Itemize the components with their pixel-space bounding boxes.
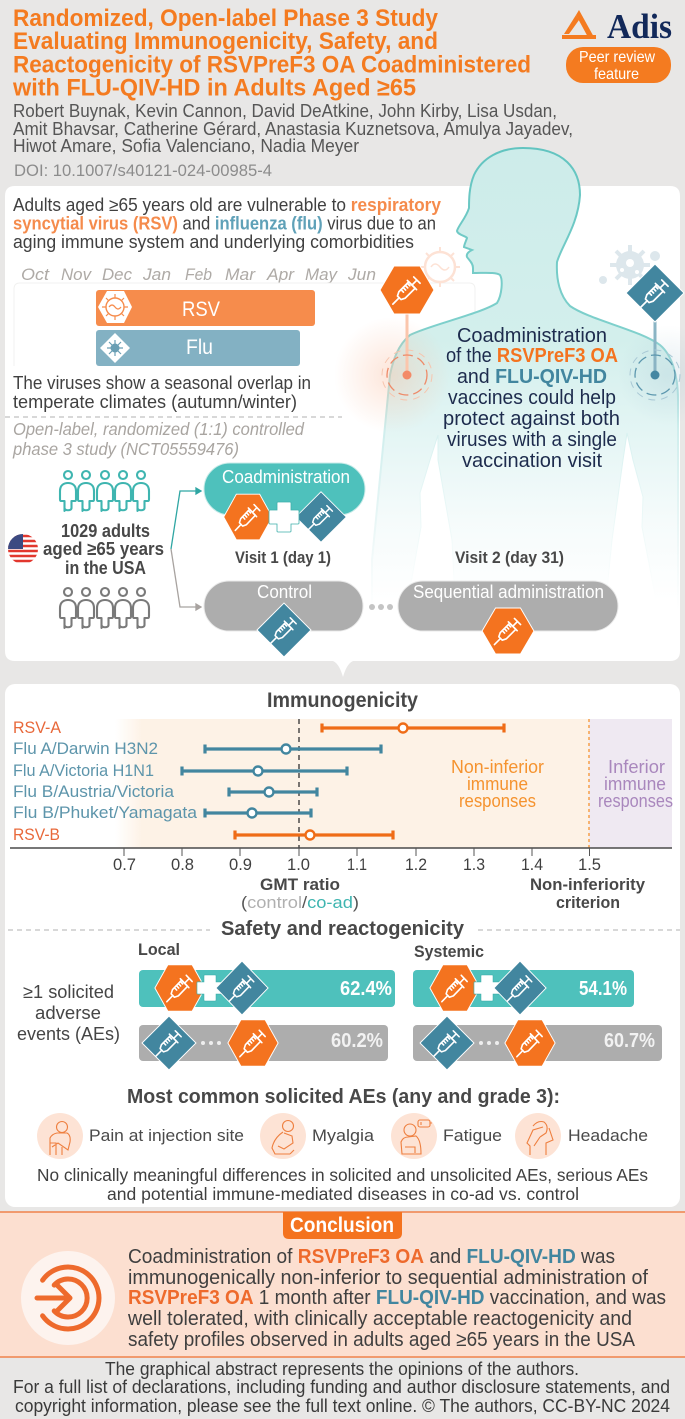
control pill — [204, 581, 363, 657]
seasonal overlap text: The viruses show a seasonal overlap in — [13, 373, 311, 393]
month labels: Oct — [21, 265, 50, 284]
flu bar: Flu — [186, 336, 213, 359]
row: RSV-A: RSV-A — [13, 718, 62, 737]
logo: Adis — [562, 7, 672, 46]
control pill: Control — [257, 582, 312, 602]
logo: Adis: Adis — [607, 7, 672, 46]
axis: 1.2 — [405, 855, 427, 874]
coadministration pill — [204, 463, 365, 542]
row: Flu A/Darwin H3N2: Flu A/Darwin H3N2 — [13, 739, 158, 758]
non-inferior region — [115, 719, 589, 848]
participants: grey group — [60, 588, 149, 628]
inferior region: responses — [598, 791, 673, 811]
badge: peer review feature: Peer review — [579, 49, 655, 66]
conclusion tab: Conclusion — [290, 1214, 394, 1237]
panel: background and study design — [5, 186, 680, 677]
participants text: 1029 adults — [61, 521, 150, 541]
title: Evaluating Immunogenicity, Safety, and — [13, 28, 438, 55]
coadministration message: protect against both — [443, 408, 620, 430]
coadministration message: viruses with a single — [447, 429, 617, 451]
row: Flu A/Victoria H1N1 — [13, 761, 347, 780]
axis: 1.3 — [463, 855, 485, 874]
adverse events label — [17, 982, 120, 1044]
axis — [10, 848, 672, 874]
safety summary text: No clinically meaningful differences in solicited and unsolicited AEs, serious AEs — [37, 1165, 648, 1185]
month labels: May — [305, 265, 338, 284]
safety summary text — [37, 1165, 648, 1204]
adverse events label: ≥1 solicited — [23, 982, 114, 1002]
sequential administration pill: Sequential administration — [413, 582, 604, 602]
authors: Robert Buynak, Kevin Cannon, David DeAtkine, John Kirby, Lisa Usdan, — [13, 101, 557, 121]
arrow to control — [171, 549, 201, 610]
injection site: RSVPreF3 OA — [380, 266, 434, 400]
panel: conclusion — [0, 1212, 685, 1357]
coadministration message: vaccination visit — [462, 450, 602, 472]
authors: Hiwot Amare, Sofia Valenciano, Nadia Meyer — [13, 136, 359, 156]
bar: local co-ad 62.4%: 62.4% — [340, 978, 392, 1000]
non-inferior region: immune — [467, 774, 528, 794]
study type text: phase 3 study (NCT05559476) — [12, 439, 239, 459]
axis title: GMT ratio: GMT ratio — [260, 875, 340, 894]
bar: local control 60.2%: 60.2% — [331, 1030, 383, 1052]
conclusion text: safety profiles observed in adults aged ≥65 years in the USA — [128, 1329, 636, 1351]
axis title: non-inferiority criterion — [530, 875, 646, 912]
badge: peer review feature — [566, 47, 671, 83]
month labels: Feb — [185, 265, 212, 284]
row: Flu A/Darwin H3N2 — [13, 739, 381, 758]
coadministration message: of the RSVPreF3 OA — [446, 345, 618, 367]
inferior region — [589, 719, 673, 848]
bar: systemic control 60.7%: 60.7% — [604, 1030, 655, 1052]
conclusion text — [127, 1246, 666, 1351]
bar: local control 60.2% — [139, 1016, 388, 1070]
sequential administration pill — [398, 581, 618, 654]
title: Randomized, Open-label Phase 3 Study — [13, 5, 439, 32]
study type text: Open-label, randomized (1:1) controlled — [13, 419, 305, 439]
label: systemic: Systemic — [414, 942, 484, 961]
axis: 0.9 — [229, 855, 252, 874]
icon: faint RSV virus — [420, 247, 460, 287]
row: Flu B/Austria/Victoria: Flu B/Austria/Victoria — [13, 782, 175, 801]
row: Flu B/Phuket/Yamagata: Flu B/Phuket/Yamagata — [13, 803, 198, 822]
month labels: Jun — [347, 265, 376, 284]
intro text: aging immune system and underlying comorbidities — [13, 232, 414, 252]
inferior region: Inferior — [608, 757, 665, 777]
icon: target with arrow — [21, 1251, 115, 1345]
month labels: Mar — [225, 265, 256, 284]
conclusion text: immunogenically non-inferior to sequential administration of — [128, 1267, 648, 1289]
RSV bar — [96, 290, 315, 326]
conclusion text: well tolerated, with clinically acceptable reactogenicity and — [127, 1308, 632, 1330]
arrow to coadministration — [171, 488, 201, 549]
coadministration message — [443, 325, 620, 472]
dots between control and sequential — [369, 604, 393, 610]
visit 1 label: Visit 1 (day 1) — [235, 548, 331, 567]
axis: 1.5 — [578, 855, 601, 874]
safety summary text: and potential immune-mediated diseases in co-ad vs. control — [107, 1184, 579, 1204]
study type text — [12, 419, 305, 459]
conclusion text: Coadministration of RSVPreF3 OA and FLU-QIV-HD was — [128, 1246, 615, 1268]
month labels: Dec — [102, 265, 132, 284]
bar: systemic control 60.7% — [413, 1016, 662, 1070]
icon: USA flag — [8, 534, 38, 564]
bar: systemic co-ad 54.1% — [413, 961, 634, 1015]
bar: local co-ad 62.4% — [139, 961, 395, 1015]
icon: pain at injection site — [37, 1113, 83, 1159]
badge: peer review feature: feature — [594, 66, 639, 83]
axis: 1.0 — [287, 855, 310, 874]
participants: teal group — [60, 471, 149, 511]
axis: 0.8 — [171, 855, 194, 874]
adverse events label: events (AEs) — [17, 1024, 120, 1044]
row: RSV-B — [13, 825, 393, 844]
coadministration message: Coadministration — [457, 325, 607, 347]
axis: 1.4 — [521, 855, 543, 874]
axis title: GMT ratio: (control/co-ad) — [241, 893, 359, 912]
coadministration message: vaccines could help — [448, 387, 616, 409]
row: Flu B/Phuket/Yamagata — [13, 803, 311, 822]
panel: immunogenicity and safety — [5, 684, 680, 1207]
row: RSV-A — [13, 718, 504, 737]
month labels: Apr — [266, 265, 295, 284]
label: myalgia: Myalgia — [312, 1126, 375, 1145]
axis title: non-inferiority criterion: Non-inferiority — [530, 875, 646, 894]
label: pain at injection site: Pain at injection site — [89, 1126, 244, 1145]
icon: faint flu virus — [599, 245, 660, 285]
seasonal chart — [14, 265, 475, 366]
label: fatigue: Fatigue — [443, 1126, 502, 1145]
footer — [13, 1359, 670, 1416]
footer: For a full list of declarations, including funding and author disclosure statements, and — [13, 1377, 670, 1397]
axis title: non-inferiority criterion: criterion — [556, 893, 620, 912]
seasonal overlap text: temperate climates (autumn/winter) — [13, 392, 297, 412]
participants text: aged ≥65 years — [43, 539, 164, 559]
intro text: Adults aged ≥65 years old are vulnerable to respiratory — [13, 195, 441, 215]
flu bar — [96, 330, 300, 366]
axis: 0.7 — [113, 855, 136, 874]
authors — [13, 101, 573, 156]
axis: 1.1 — [347, 855, 367, 874]
row: Flu B/Austria/Victoria — [13, 782, 317, 801]
RSV bar: RSV — [182, 298, 220, 321]
adverse events label: adverse — [35, 1003, 101, 1023]
axis title: GMT ratio — [241, 875, 359, 912]
human silhouette — [372, 148, 678, 640]
month labels: Nov — [61, 265, 92, 284]
icon: fatigue — [391, 1113, 437, 1159]
row: RSV-B: RSV-B — [13, 825, 60, 844]
heading: immunogenicity: Immunogenicity — [267, 689, 418, 712]
coadministration pill: Coadministration — [222, 467, 350, 487]
footer: The graphical abstract represents the opinions of the authors. — [105, 1359, 579, 1379]
seasonal overlap text — [13, 373, 311, 412]
non-inferior region: Non-inferior — [451, 757, 544, 777]
label: local: Local — [138, 940, 180, 959]
intro text: syncytial virus (RSV) and influenza (flu) virus due to an — [13, 214, 436, 234]
bar: systemic co-ad 54.1%: 54.1% — [579, 978, 627, 1000]
heading: safety and reactogenicity: Safety and reactogenicity — [221, 918, 465, 940]
coadministration message: and FLU-QIV-HD — [457, 366, 607, 388]
month labels — [21, 265, 376, 284]
icon: myalgia — [260, 1113, 306, 1159]
icon: headache — [515, 1113, 561, 1159]
visit 2 label: Visit 2 (day 31) — [455, 548, 564, 567]
vaccination site glow left — [334, 317, 450, 433]
participants text: in the USA — [65, 558, 146, 578]
non-inferior region: responses — [459, 791, 536, 811]
title — [12, 5, 531, 102]
DOI: DOI: 10.1007/s40121-024-00985-4 — [14, 161, 272, 180]
forest plot — [10, 718, 673, 874]
participants text — [43, 521, 164, 578]
conclusion text: RSVPreF3 OA 1 month after FLU-QIV-HD vaccination, and was — [128, 1287, 666, 1309]
title: Reactogenicity of RSVPreF3 OA Coadministered — [13, 52, 531, 78]
injection site: FLU-QIV-HD — [626, 264, 684, 400]
intro text — [13, 195, 441, 252]
title: with FLU-QIV-HD in Adults Aged ≥65 — [12, 74, 416, 102]
vaccination site glow right — [618, 325, 685, 425]
month labels: Jan — [142, 265, 171, 284]
footer: copyright information, please see the full text online. © The authors, CC-BY-NC 2024 — [15, 1396, 670, 1416]
row: Flu A/Victoria H1N1: Flu A/Victoria H1N1 — [13, 761, 154, 780]
inferior region: immune — [604, 774, 666, 794]
label: headache: Headache — [568, 1126, 648, 1145]
authors: Amit Bhavsar, Catherine Gérard, Anastasia Kuznetsova, Amulya Jayadev, — [13, 119, 573, 139]
heading: most common solicited AEs: Most common solicited AEs (any and grade 3): — [127, 1086, 560, 1108]
